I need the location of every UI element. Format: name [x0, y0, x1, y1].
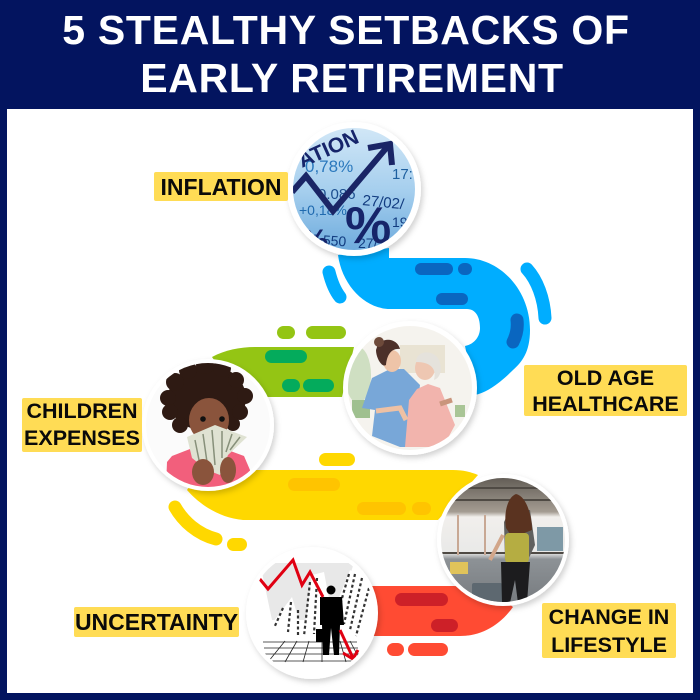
label: children expenses: EXPENSES — [24, 426, 140, 450]
circle: inflation: ATION — [295, 126, 362, 173]
circle: inflation: 0,78% — [305, 157, 353, 176]
label: change in lifestyle: LIFESTYLE — [551, 633, 667, 657]
label: change in lifestyle — [542, 603, 676, 658]
yellow path segment — [175, 453, 478, 551]
circle: old age healthcare — [343, 321, 477, 455]
circle: inflation: % — [300, 223, 328, 259]
label: old age healthcare: OLD AGE — [557, 366, 654, 390]
green path segment — [212, 326, 354, 397]
label: change in lifestyle: CHANGE IN — [549, 605, 669, 629]
circle: inflation: 27/02/ — [362, 192, 406, 213]
label: children expenses — [22, 398, 142, 452]
circle: inflation: % — [345, 197, 391, 255]
red path segment — [372, 586, 513, 656]
label: old age healthcare — [524, 365, 687, 416]
circle: change in lifestyle — [437, 474, 569, 607]
circle: inflation: 19: — [392, 214, 411, 230]
blue path segment — [329, 248, 545, 395]
circle: inflation: 27/ — [358, 235, 378, 251]
winding path and circles — [142, 126, 574, 684]
title — [62, 7, 630, 101]
title: EARLY RETIREMENT — [140, 55, 564, 101]
circle: children expenses — [142, 356, 274, 491]
circle: inflation: 17: — [392, 166, 413, 183]
circle: inflation: 0.550 — [311, 231, 347, 249]
label: old age healthcare: HEALTHCARE — [532, 392, 679, 416]
label: inflation: INFLATION — [161, 174, 281, 200]
circle: inflation — [287, 122, 421, 259]
label: children expenses: CHILDREN — [26, 399, 138, 423]
label: uncertainty: UNCERTAINTY — [75, 609, 238, 635]
circle: inflation: +0,18% — [299, 202, 347, 218]
circle: uncertainty — [246, 547, 378, 680]
circle: inflation: 0.086 — [318, 186, 356, 203]
title: 5 STEALTHY SETBACKS OF — [62, 7, 630, 53]
